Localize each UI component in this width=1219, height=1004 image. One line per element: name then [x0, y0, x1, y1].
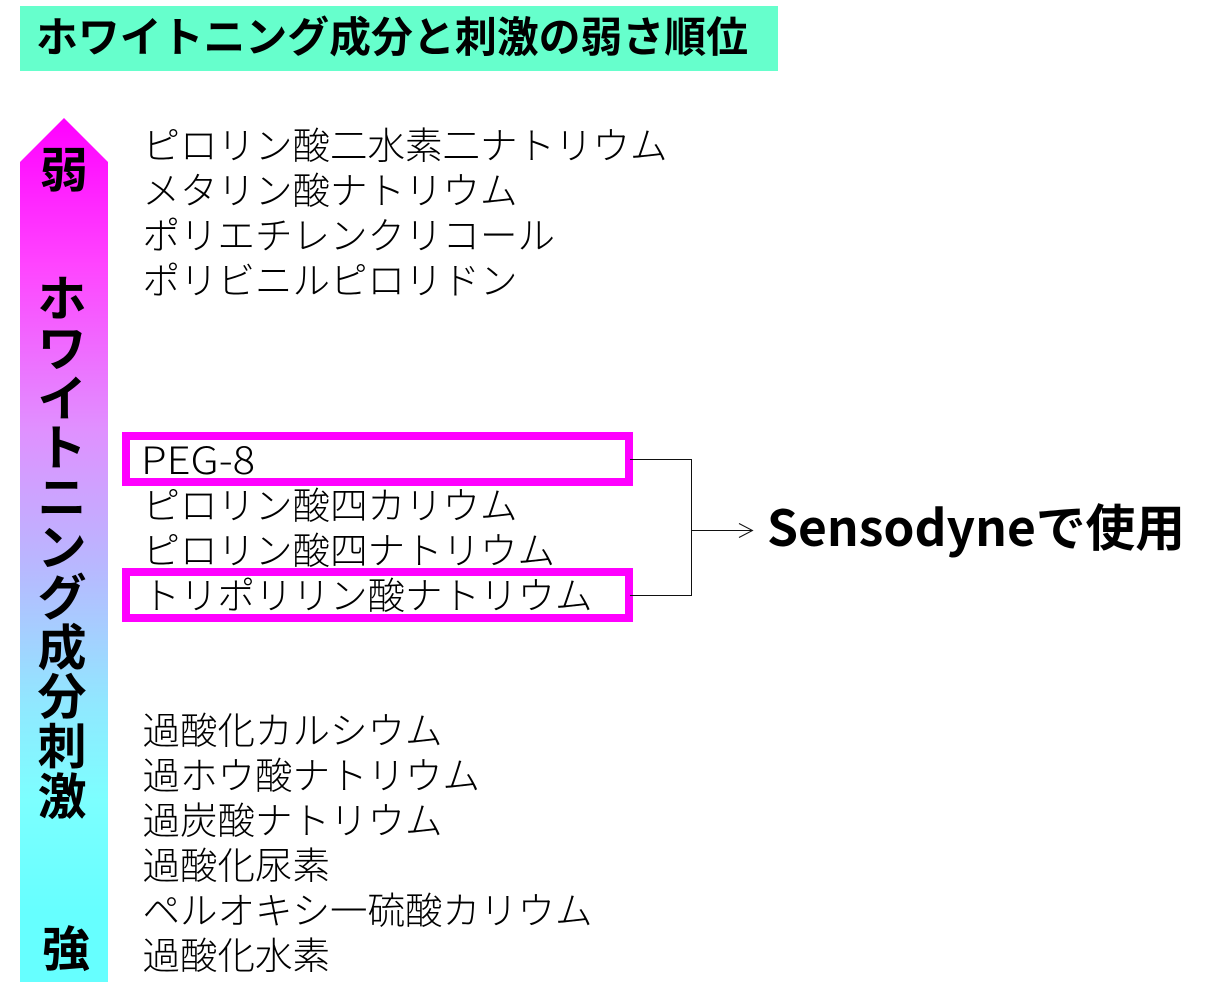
label: whitening ingredient irritation: ン [37, 509, 87, 580]
list: medium irritation ingredients: PEG-8 [141, 430, 255, 485]
list: weak irritation ingredients: ポリエチレンクリコール [142, 205, 555, 260]
label: whitening ingredient irritation [37, 260, 87, 829]
list: strong irritation ingredients: 過炭酸ナトリウム [142, 790, 442, 845]
list: strong irritation ingredients: ペルオキシ一硫酸カリウム [142, 880, 592, 935]
highlight box: PEG-8 [126, 436, 629, 482]
list: strong irritation ingredients [142, 700, 592, 980]
list: strong irritation ingredients: 過酸化尿素 [142, 835, 330, 890]
label: whitening ingredient irritation: グ [37, 559, 87, 630]
callout: used in Sensodyne: Sensodyneで使用 [767, 489, 1185, 561]
list: weak irritation ingredients: メタリン酸ナトリウム [142, 160, 518, 215]
label: whitening ingredient irritation: ホ [37, 260, 87, 331]
list: weak irritation ingredients [142, 115, 668, 305]
list: strong irritation ingredients: 過ホウ酸ナトリウム [142, 745, 480, 800]
list: weak irritation ingredients: ポリビニルピロリドン [142, 250, 518, 305]
bracket connector with arrow [630, 460, 752, 596]
label: whitening ingredient irritation: ニ [37, 459, 87, 530]
list: strong irritation ingredients: 過酸化カルシウム [142, 700, 442, 755]
label: whitening ingredient irritation: 分 [37, 658, 87, 729]
label: whitening ingredient irritation: ワ [37, 310, 87, 381]
list: medium irritation ingredients: ピロリン酸四ナトリウム [142, 520, 555, 575]
highlight box: sodium tripolyphosphate [126, 572, 629, 618]
label: whitening ingredient irritation: 激 [37, 758, 87, 829]
list: medium irritation ingredients: ピロリン酸四カリウム [142, 475, 518, 530]
label: weak: 弱 [40, 131, 88, 201]
title banner: ホワイトニング成分と刺激の弱さ順位 [36, 5, 748, 65]
label: whitening ingredient irritation: ト [37, 409, 87, 480]
list: medium irritation ingredients [141, 430, 592, 620]
list: weak irritation ingredients: ピロリン酸二水素二ナトリウム [142, 115, 668, 170]
list: medium irritation ingredients: トリポリリン酸ナトリウム [142, 565, 592, 620]
label: whitening ingredient irritation: 刺 [37, 708, 87, 779]
label: strong: 強 [42, 910, 90, 980]
list: strong irritation ingredients: 過酸化水素 [142, 925, 330, 980]
gradient arrow: irritation scale [20, 118, 108, 982]
label: whitening ingredient irritation: 成 [37, 609, 87, 680]
label: whitening ingredient irritation: イ [37, 360, 87, 431]
